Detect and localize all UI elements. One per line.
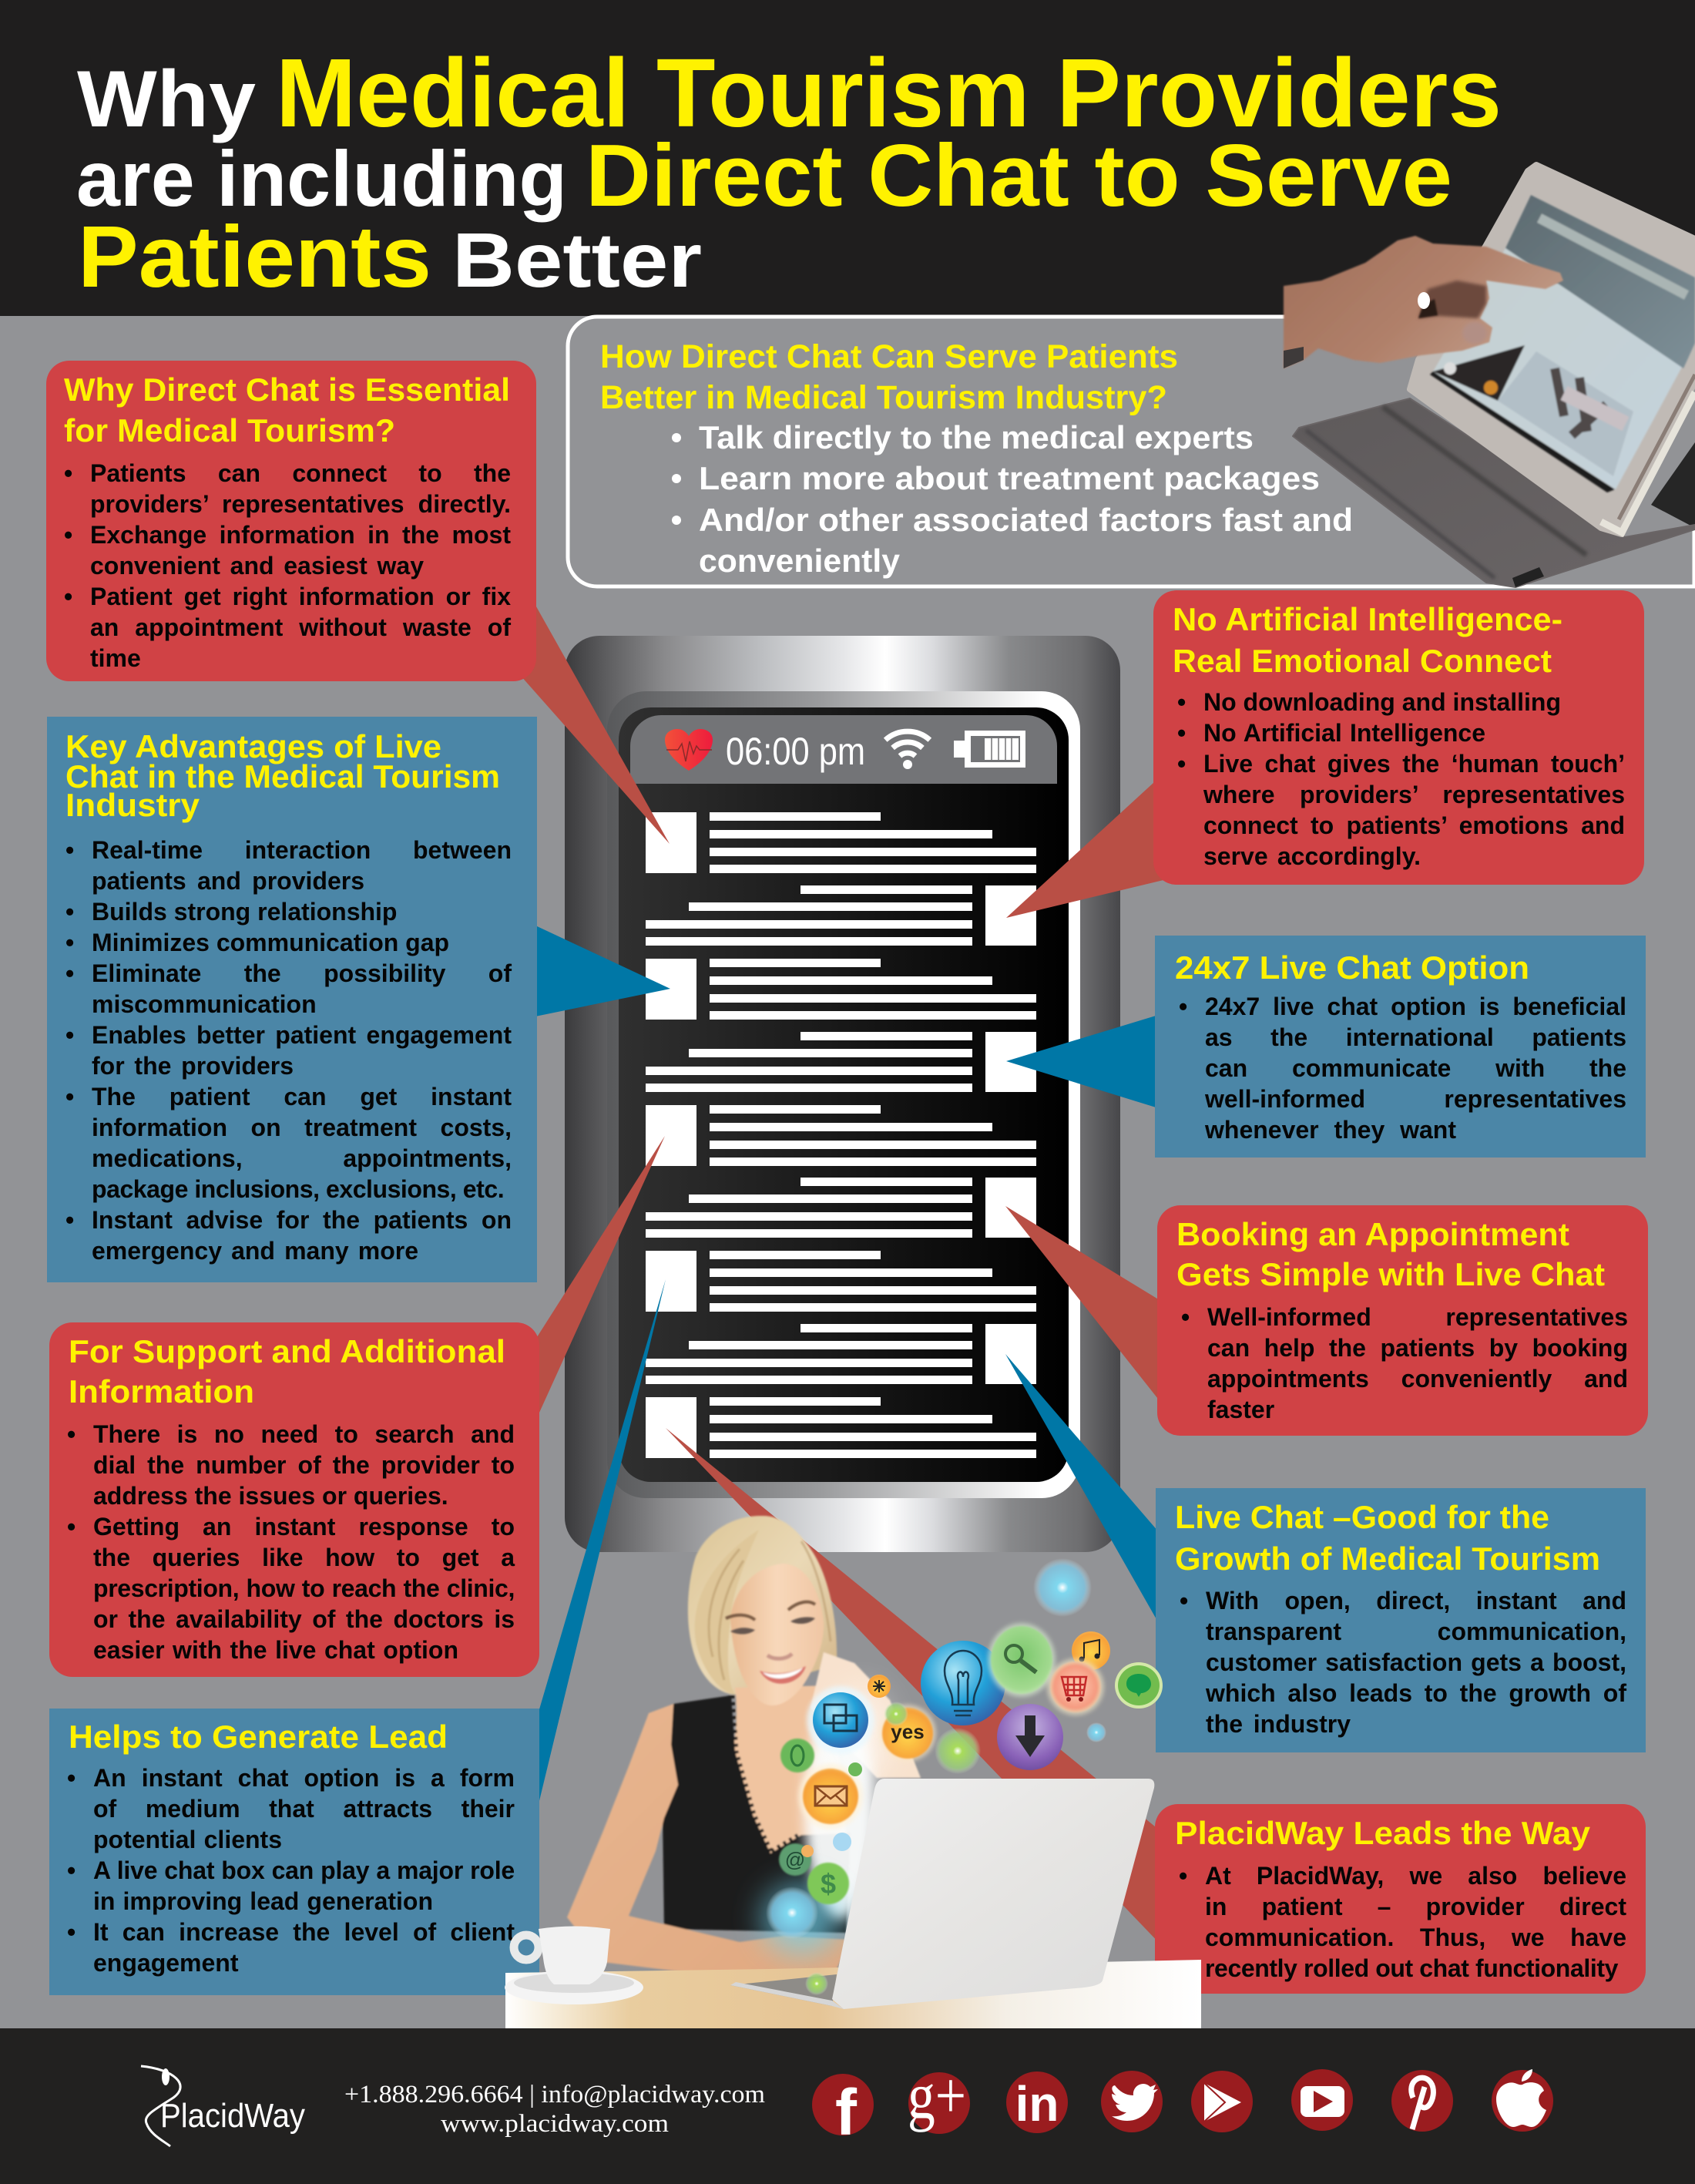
- bullet list: [1177, 688, 1625, 870]
- heading: Industry: [65, 787, 200, 823]
- heading: Helps to Generate Lead: [69, 1719, 448, 1755]
- icon: pinterest: [1391, 2070, 1453, 2132]
- icon: mail: [798, 1764, 863, 1829]
- icon: youtube: [1291, 2069, 1353, 2131]
- bullet list: package inclusions, exclusions, etc.: [92, 1175, 504, 1203]
- bullet list: easier with the live chat option: [93, 1636, 458, 1664]
- bullet list: communication. Thus, we have: [1205, 1924, 1626, 1951]
- panel: live chat good for growth: [1156, 1488, 1646, 1752]
- panel: no artificial intelligence: •: [1177, 750, 1186, 778]
- icon: play store: [1191, 2071, 1253, 2132]
- panel: how direct chat can serve patients: [566, 314, 1695, 589]
- contact details: [344, 2081, 765, 2138]
- bullet list: A live chat box can play a major role: [93, 1856, 515, 1884]
- bullet list: patients and providers: [92, 867, 364, 895]
- tablet screen: [1430, 195, 1695, 492]
- panel: helps to generate lead: •: [67, 1764, 76, 1792]
- bullet list: customer satisfaction gets a boost,: [1206, 1648, 1626, 1676]
- icon: download arrow: [997, 1704, 1063, 1770]
- icon: light bulb: [921, 1641, 1005, 1725]
- panel: key advantages of live chat: •: [65, 836, 74, 864]
- panel: no artificial intelligence: •: [1177, 688, 1186, 716]
- bullet list: [1179, 1862, 1626, 1982]
- bullet list: Live chat gives the ‘human touch’: [1203, 750, 1625, 778]
- heading: Live Chat –Good for the: [1175, 1499, 1549, 1535]
- bullet list: which also leads to the growth of: [1206, 1679, 1626, 1707]
- bullet list: recently rolled out chat functionality: [1205, 1954, 1618, 1982]
- bullet list: Minimizes communication gap: [92, 929, 449, 956]
- contact details: www.placidway.com: [441, 2110, 669, 2138]
- bullet list: faster: [1207, 1396, 1274, 1423]
- bullet list: There is no need to search and: [93, 1420, 515, 1448]
- bullet list: No Artificial Intelligence: [1203, 719, 1485, 747]
- icon: battery: [954, 731, 1025, 768]
- heading: Why Direct Chat is Essential: [64, 371, 510, 408]
- bullet list: [1179, 993, 1626, 1144]
- bullet list: Real-time interaction between: [92, 836, 512, 864]
- title: Why: [77, 55, 256, 144]
- title: Better: [452, 217, 702, 304]
- bullet list: or the availability of the doctors is: [93, 1605, 515, 1633]
- bullet list: With open, direct, instant and: [1206, 1587, 1626, 1614]
- bullet list: Enables better patient engagement: [92, 1021, 512, 1049]
- bullet list: of medium that attracts their: [93, 1795, 515, 1823]
- icon: facebook: f: [835, 2076, 858, 2149]
- bullet list: Exchange information in the most: [90, 521, 511, 549]
- footer artwork: [140, 2058, 1553, 2149]
- heading: Gets Simple with Live Chat: [1176, 1256, 1605, 1292]
- panel: why direct chat is essential: •: [64, 583, 72, 610]
- icon: magnifier: [988, 1623, 1056, 1697]
- panel: helps to generate lead: •: [67, 1918, 76, 1946]
- panel bullet list: conveniently: [699, 543, 901, 579]
- bullet list: Builds strong relationship: [92, 898, 397, 926]
- bullet list: An instant chat option is a form: [93, 1764, 515, 1792]
- heading: For Support and Additional: [69, 1333, 505, 1369]
- table: [505, 1960, 1201, 2028]
- panel heading: How Direct Chat Can Serve Patients: [600, 338, 1178, 375]
- icon: film: [807, 1686, 874, 1754]
- icon: shopping cart: [1047, 1658, 1104, 1715]
- bullet list: for the providers: [92, 1052, 294, 1080]
- title: [76, 39, 1502, 305]
- bullet list: medications, appointments,: [92, 1144, 512, 1172]
- panel: key advantages of live chat: •: [65, 898, 74, 926]
- panel: for support and additional information: •: [67, 1513, 76, 1541]
- heading: Booking an Appointment: [1176, 1216, 1569, 1252]
- icon: leaf: [780, 1739, 814, 1772]
- icon: linkedin: in: [1015, 2076, 1059, 2132]
- bullet list: can communicate with the: [1205, 1054, 1626, 1082]
- laptop: [730, 1779, 1154, 2009]
- icon: at sign: @: [785, 1848, 805, 1871]
- heading: [65, 728, 500, 823]
- icon: google plus: g+: [908, 2058, 966, 2132]
- heading: [64, 371, 510, 449]
- bullet list: No downloading and installing: [1203, 688, 1561, 716]
- tablet body: [1410, 165, 1695, 534]
- bullet list: prescription, how to reach the clinic,: [93, 1574, 515, 1602]
- bullet list: address the issues or queries.: [93, 1482, 448, 1510]
- bullet list: in improving lead generation: [93, 1887, 433, 1915]
- footer band: [0, 2028, 1695, 2184]
- tablet cover: [1293, 398, 1695, 587]
- glow orbs: [766, 1558, 1106, 1995]
- bullet list: the industry: [1206, 1710, 1351, 1738]
- heading: for Medical Tourism?: [64, 412, 395, 449]
- header band with title: [0, 0, 1695, 316]
- bullet list: in patient – provider direct: [1205, 1893, 1626, 1920]
- status bar: [630, 715, 1057, 784]
- bullet list: appointments conveniently and: [1207, 1365, 1628, 1393]
- icon: music note: [1072, 1631, 1110, 1670]
- bullet list: whenever they want: [1205, 1116, 1456, 1144]
- heading: Real Emotional Connect: [1173, 643, 1552, 679]
- panel heading: [600, 338, 1178, 416]
- heading: 24x7 Live Chat Option: [1175, 949, 1529, 986]
- icon: facebook: [812, 2074, 874, 2149]
- bullet list: potential clients: [93, 1826, 282, 1853]
- bullet list: At PlacidWay, we also believe: [1205, 1862, 1626, 1890]
- bullet list: connect to patients’ emotions and: [1203, 811, 1625, 839]
- bullet list: serve accordingly.: [1203, 842, 1421, 870]
- bullet list: engagement: [93, 1949, 238, 1977]
- clock: 06:00 pm: [726, 730, 865, 773]
- panel: placidway leads the way: [1155, 1804, 1646, 1994]
- bullet list: [1181, 1303, 1628, 1423]
- panel: helps to generate lead: •: [67, 1856, 76, 1884]
- panel: placidway leads the way: •: [1179, 1862, 1187, 1890]
- icon: yes bubble: [879, 1705, 936, 1762]
- bullet list: Eliminate the possibility of: [92, 959, 512, 987]
- photo: hand and tablet: [1282, 162, 1695, 588]
- heading: [1173, 601, 1562, 679]
- bullet list: Well-informed representatives: [1207, 1303, 1628, 1331]
- bullet list: It can increase the level of client: [93, 1918, 515, 1946]
- panel: key advantages of live chat: •: [65, 1206, 74, 1234]
- bullet list: well-informed representatives: [1205, 1085, 1626, 1113]
- icon: dollar: [807, 1863, 849, 1904]
- icon: heart with pulse: [665, 729, 713, 771]
- bullet list: providers’ representatives directly.: [90, 490, 511, 518]
- bullet list: 24x7 live chat option is beneficial: [1205, 993, 1626, 1020]
- panel: key advantages of live chat: •: [65, 959, 74, 987]
- icon: at sign: [779, 1843, 811, 1876]
- bullet list: Patients can connect to the: [90, 459, 511, 487]
- icon: wifi: [885, 731, 930, 769]
- bullet list: miscommunication: [92, 990, 317, 1018]
- panel: key advantages of live chat: •: [65, 1083, 74, 1110]
- title: Direct Chat to Serve: [586, 127, 1452, 225]
- panel: for support and additional information: •: [67, 1420, 76, 1448]
- hand: [1284, 236, 1563, 368]
- bullet list: [1180, 1587, 1627, 1738]
- panel: why direct chat is essential: •: [64, 459, 72, 487]
- panel: live chat good for growth: •: [1180, 1587, 1188, 1614]
- bullet list: emergency and many more: [92, 1237, 418, 1265]
- bullet list: where providers’ representatives: [1203, 781, 1625, 808]
- panel: no artificial intelligence: [1153, 590, 1644, 885]
- icon: apple: [1492, 2069, 1553, 2132]
- panel bullet list: Learn more about treatment packages: [699, 460, 1320, 496]
- icon: sun: [868, 1675, 891, 1698]
- bullet list: [64, 459, 512, 672]
- bullet list: convenient and easiest way: [90, 552, 424, 580]
- title: Patients: [78, 208, 431, 305]
- bullet list: information on treatment costs,: [92, 1114, 512, 1141]
- heading: Information: [69, 1373, 254, 1410]
- icon: dollar: $: [821, 1868, 836, 1900]
- heading: PlacidWay Leads the Way: [1175, 1815, 1591, 1851]
- face features: [726, 1602, 815, 1684]
- panel: key advantages of live chat: •: [65, 929, 74, 956]
- bullet list: can help the patients by booking: [1207, 1334, 1628, 1362]
- title: Medical Tourism Providers: [276, 39, 1502, 147]
- bullet list: The patient can get instant: [92, 1083, 512, 1110]
- icon: twitter: [1101, 2071, 1163, 2132]
- contact details: +1.888.296.6664 | info@placidway.com: [344, 2081, 765, 2108]
- panel: 24x7 live chat option: •: [1179, 993, 1187, 1020]
- bullet list: Getting an instant response to: [93, 1513, 515, 1541]
- panel bullet list: Talk directly to the medical experts: [699, 419, 1254, 455]
- bullet list: [67, 1764, 515, 1977]
- panel: for support and additional information: [49, 1322, 539, 1677]
- icon: linkedin: [1006, 2071, 1068, 2133]
- panel heading: Better in Medical Tourism Industry?: [600, 379, 1167, 416]
- heading: [1175, 1499, 1600, 1577]
- panel: key advantages of live chat: [47, 717, 537, 1282]
- title: are including: [76, 135, 567, 223]
- bullet list: the queries like how to get a: [93, 1544, 515, 1571]
- bullet list: [67, 1420, 515, 1664]
- bullet list: transparent communication,: [1206, 1618, 1626, 1645]
- chat message rows: [646, 812, 1036, 1458]
- icon: yes bubble: yes: [891, 1720, 925, 1743]
- logo: PlacidWay: PlacidWay: [160, 2097, 305, 2135]
- heading: No Artificial Intelligence-: [1173, 601, 1562, 637]
- bullet list: time: [90, 644, 141, 672]
- bullet list: an appointment without waste of: [90, 613, 511, 641]
- bullet list: Patient get right information or fix: [90, 583, 511, 610]
- panel bullet list: And/or other associated factors fast and: [699, 502, 1353, 538]
- bullet list: as the international patients: [1205, 1023, 1626, 1051]
- panel: helps to generate lead: [49, 1709, 539, 1995]
- panel: booking an appointment: •: [1181, 1303, 1190, 1331]
- panel: key advantages of live chat: •: [65, 1021, 74, 1049]
- panel: why direct chat is essential: •: [64, 521, 72, 549]
- heading: [69, 1333, 505, 1410]
- bullet list: [65, 836, 512, 1265]
- bullet list: Instant advise for the patients on: [92, 1206, 512, 1234]
- heading: [1176, 1216, 1605, 1292]
- heading: Key Advantages of Live: [65, 728, 441, 764]
- bullet list: dial the number of the provider to: [93, 1451, 515, 1479]
- woman: [567, 1516, 921, 1978]
- heading: Growth of Medical Tourism: [1175, 1541, 1600, 1577]
- panel bullet list: [672, 419, 1353, 579]
- logo: PlacidWay: [141, 2066, 305, 2146]
- coffee cup: [505, 1927, 643, 2004]
- panel: booking an appointment: [1157, 1205, 1648, 1436]
- heading: Chat in the Medical Tourism: [65, 758, 500, 795]
- panel: why direct chat is essential: [46, 361, 536, 681]
- panel: 24x7 live chat option: [1155, 936, 1646, 1158]
- icon: chat bubble: [1115, 1662, 1163, 1709]
- panel: no artificial intelligence: •: [1177, 719, 1186, 747]
- floating app icons: [766, 1558, 1163, 1995]
